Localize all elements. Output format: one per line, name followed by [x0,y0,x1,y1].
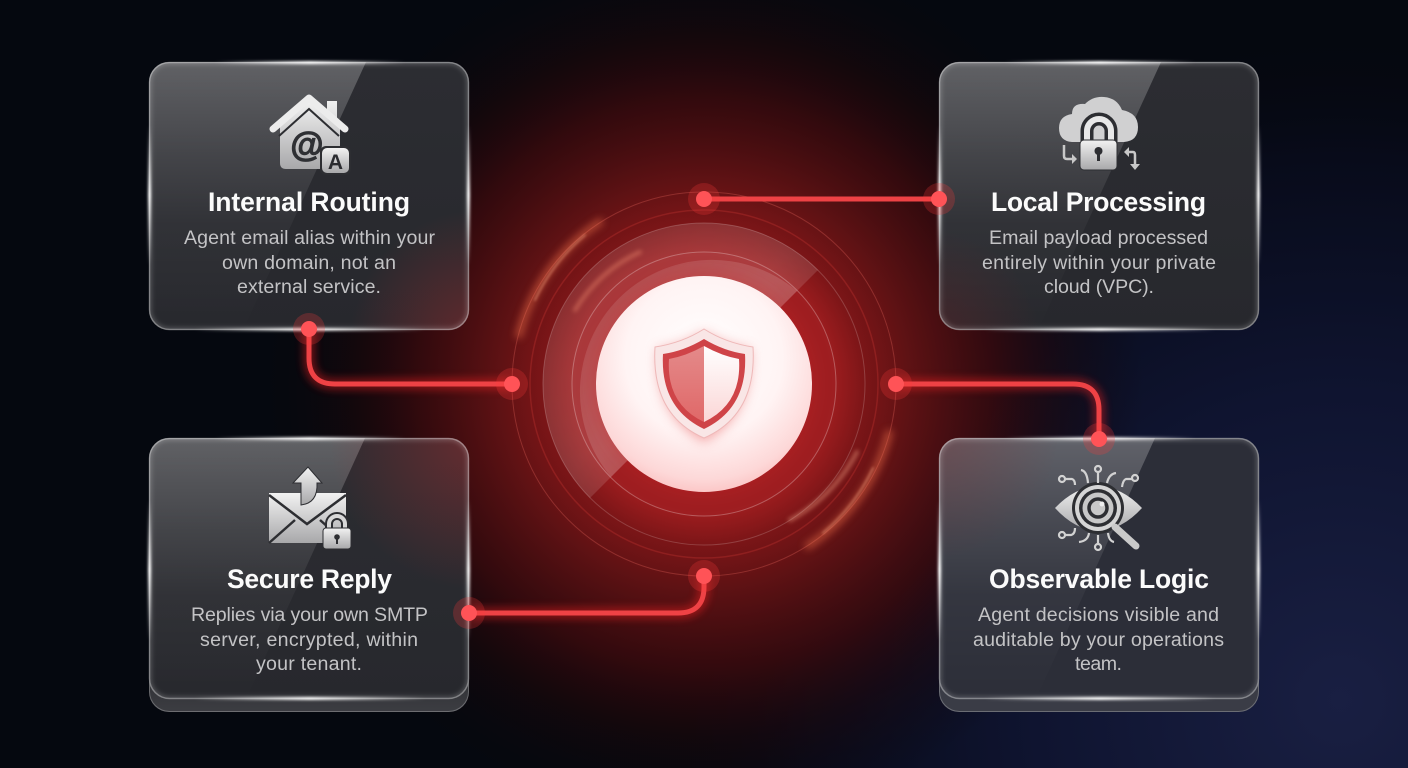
icon: shield [655,329,753,442]
panel: internal routing [148,61,470,331]
text block [973,604,1224,675]
glowing swoosh arcs [519,222,889,546]
connection nodes [293,183,1115,629]
text block: entirely within your private [982,252,1216,274]
icon: house with at sign: A [328,151,343,174]
text block: Agent email alias within your [184,227,435,249]
heading: Observable Logic [989,564,1209,594]
connector: secure reply to hub [469,576,704,613]
text block: cloud (VPC). [1044,276,1154,298]
heading: Local Processing [991,187,1206,217]
icon: house with at sign [273,98,351,175]
text block: own domain, not an [222,252,396,274]
text block [191,604,428,675]
panel: local processing [938,61,1260,331]
text block: server, encrypted, within [200,629,418,651]
text block: external service. [237,276,381,298]
central shield hub [512,192,896,576]
text block: your tenant. [256,653,362,675]
connector: hub to local processing [704,193,939,205]
icon: house with at sign: @ [290,126,324,164]
text block: Agent decisions visible and [978,604,1219,626]
text block: Email payload processed [989,227,1208,249]
heading: Secure Reply [227,564,392,594]
icon: eye with magnifier and circuit nodes [1055,466,1142,550]
connector: internal routing to hub [309,329,512,384]
text block [184,227,435,298]
text block [982,227,1216,298]
connector: hub to observable logic [896,384,1099,439]
text block: Replies via your own SMTP [191,604,428,626]
text block: team. [1075,653,1122,675]
icon: cloud with padlock [1059,97,1140,170]
text block: auditable by your operations [973,629,1224,651]
panel: secure reply [148,437,470,712]
heading: Internal Routing [208,187,410,217]
icon: envelope with arrow and padlock [269,467,351,549]
panel: observable logic [938,437,1260,712]
